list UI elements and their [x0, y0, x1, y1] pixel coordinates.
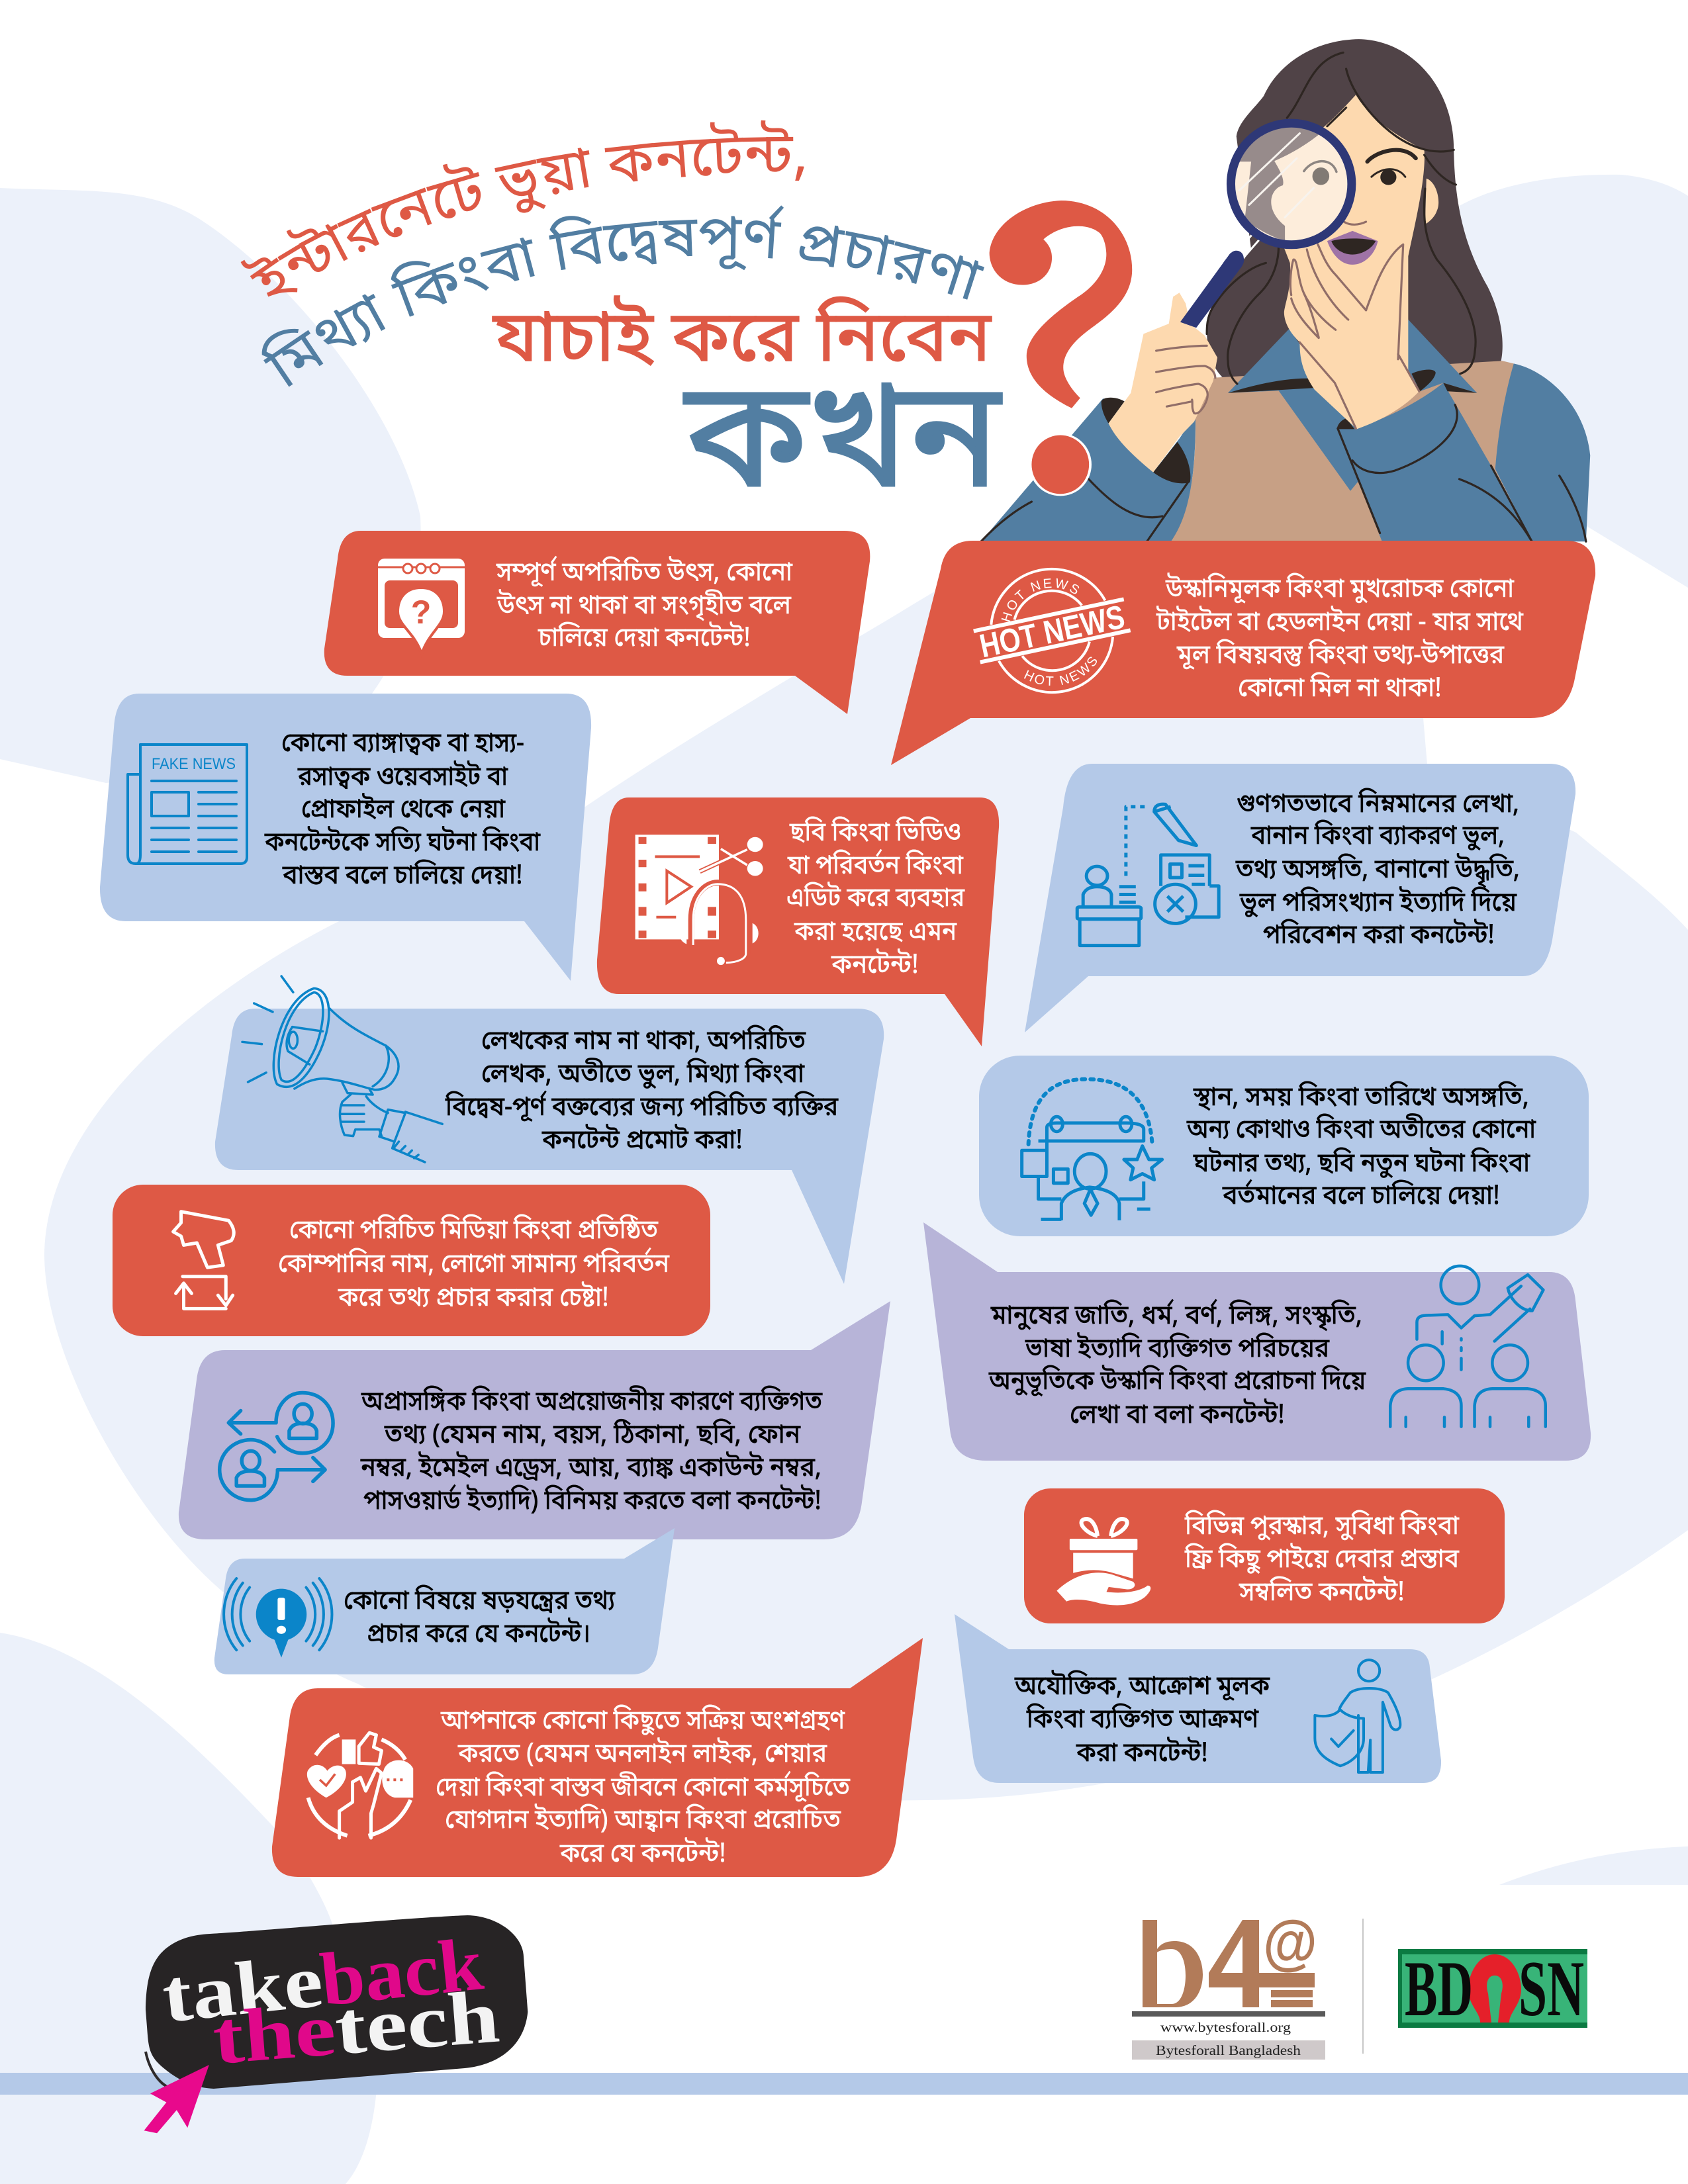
- text: edited image or video: যা পরিবর্তন কিংবা: [787, 849, 964, 885]
- text: identity provocation: অনুভূতিকে উস্কানি কিংবা প্ররোচনা দিয়ে: [988, 1365, 1366, 1400]
- text: low quality writing: পরিবেশন করা কনটেন্ট!: [1263, 919, 1495, 954]
- icon: hot news stamp: HOT NEWS: [1001, 578, 1079, 622]
- logo: take back the tech: back: [316, 1921, 487, 2022]
- text: unknown source: চালিয়ে দেয়া কনটেন্ট!: [538, 621, 751, 657]
- text: sensational headline: কোনো মিল না থাকা!: [1238, 672, 1442, 707]
- text: call to action: দেয়া কিংবা বাস্তব জীবনে কোনো কর্মসূচিতে: [436, 1771, 851, 1807]
- text: imitated brand: কোনো পরিচিত মিডিয়া কিংবা প্রতিষ্ঠিত: [289, 1214, 659, 1250]
- panel: inconsistent place and time: [979, 1056, 1589, 1236]
- text: sensational headline: [1156, 572, 1524, 707]
- text: unknown author: লেখক, অতীতে ভুল, মিথ্যা কিংবা: [481, 1058, 805, 1093]
- illustration: woman with magnifying glass: [981, 39, 1590, 541]
- text: unknown author: লেখকের নাম না থাকা, অপরিচিত: [481, 1025, 806, 1060]
- icon: hot news stamp: HOT NEWS: [976, 598, 1128, 664]
- text: imitated brand: করে তথ্য প্রচার করার চেষ্টা!: [338, 1281, 609, 1317]
- logo: b4@ Bytesforall Bangladesh: @: [1263, 1909, 1317, 1976]
- icon: film strip, scissors and headset: [635, 835, 763, 965]
- text: illogical or abusive content: করা কনটেন্ট!: [1076, 1737, 1208, 1772]
- text: personal information request: পাসওয়ার্ড ইত্যাদি) বিনিময় করতে বলা কনটেন্ট!: [363, 1484, 821, 1520]
- icon: hot news stamp: HOT NEWS: [1023, 657, 1097, 686]
- text: identity provocation: [988, 1299, 1366, 1434]
- logo: b4@ Bytesforall Bangladesh: Bytesforall Bangladesh: [1156, 2042, 1301, 2058]
- icon: like, heart and chat ring: [307, 1733, 413, 1838]
- panel: unknown author: [215, 976, 884, 1284]
- icon: calendar with presenter and star: [1022, 1079, 1162, 1220]
- title: curved and stacked heading: [241, 120, 1003, 547]
- icon: writer at desk with pencil and rejected document: [1077, 804, 1219, 946]
- text: satire or parody: কনটেন্টকে সত্যি ঘটনা কিংবা: [264, 826, 541, 862]
- text: personal information request: তথ্য (যেমন নাম, বয়স, ঠিকানা, ছবি, ফোন: [384, 1419, 801, 1454]
- icon: broadcast alert pin: [224, 1578, 332, 1658]
- text: low quality writing: ভুল পরিসংখ্যান ইত্যাদি দিয়ে: [1239, 886, 1517, 922]
- panel: edited image or video: [597, 797, 999, 1046]
- icon: megaphone and swap arrows: [173, 1212, 234, 1308]
- panel: imitated brand: [113, 1185, 710, 1336]
- text: illogical or abusive content: কিংবা ব্যক্তিগত আক্রমণ: [1026, 1703, 1259, 1739]
- text: inconsistent place and time: ঘটনার তথ্য, ছবি নতুন ঘটনা কিংবা: [1193, 1147, 1530, 1183]
- text: edited image or video: কনটেন্ট!: [831, 948, 919, 984]
- title line 1: ইন্টারনেটে ভুয়া কনটেন্ট,: [241, 120, 804, 296]
- text: unknown author: [445, 1025, 839, 1160]
- text: low quality writing: বানান কিংবা ব্যাকরণ ভুল,: [1250, 820, 1505, 855]
- text: inconsistent place and time: স্থান, সময় কিংবা তারিখে অসঙ্গতি,: [1193, 1081, 1529, 1116]
- text: low quality writing: [1235, 788, 1520, 954]
- text: inconsistent place and time: [1186, 1081, 1536, 1215]
- text: unknown author: বিদ্বেষ-পূর্ণ বক্তব্যের জন্য পরিচিত ব্যক্তির: [445, 1091, 839, 1126]
- text: identity provocation: ভাষা ইত্যাদি ব্যক্তিগত পরিচয়ের: [1025, 1332, 1330, 1368]
- text: sensational headline: মূল বিষয়বস্তু কিংবা তথ্য-উপাত্তের: [1176, 639, 1505, 674]
- text: call to action: যোগদান ইত্যাদি) আহ্বান কিংবা প্ররোচিত: [445, 1803, 841, 1839]
- text: call to action: করতে (যেমন অনলাইন লাইক, শেয়ার: [457, 1737, 827, 1773]
- text: call to action: [436, 1704, 851, 1873]
- text: sensational headline: টাইটেল বা হেডলাইন দেয়া - যার সাথে: [1156, 606, 1524, 641]
- text: unknown author: কনটেন্ট প্রমোট করা!: [541, 1124, 743, 1160]
- text: conspiracy: কোনো বিষয়ে ষড়যন্ত্রের তথ্য: [344, 1585, 616, 1620]
- icon: hot news stamp: [973, 568, 1131, 694]
- text: low quality writing: তথ্য অসঙ্গতি, বানানো উদ্ধৃতি,: [1235, 853, 1520, 889]
- panel: identity provocation: [923, 1222, 1591, 1461]
- icon: large question mark: [990, 201, 1132, 495]
- text: conspiracy: প্রচার করে যে কনটেন্ট।: [367, 1617, 590, 1653]
- text: unknown source: উৎস না থাকা বা সংগৃহীত বলে: [496, 589, 792, 625]
- panel: low quality writing: [1025, 764, 1575, 1032]
- text: free gift offer: বিভিন্ন পুরস্কার, সুবিধা কিংবা: [1184, 1510, 1460, 1545]
- icon: browser with question pin: [378, 559, 465, 654]
- text: edited image or video: করা হয়েছে এমন: [794, 916, 957, 951]
- logo: take back the tech: tech: [332, 1974, 502, 2071]
- logo: take back the tech: [144, 1915, 528, 2133]
- text: imitated brand: কোম্পানির নাম, লোগো সামান্য পরিবর্তন: [278, 1248, 670, 1283]
- text: inconsistent place and time: অন্য কোথাও কিংবা অতীতের কোনো: [1186, 1113, 1536, 1149]
- text: unknown source: সম্পূর্ণ অপরিচিত উৎস, কোনো: [496, 556, 793, 592]
- text: satire or parody: কোনো ব্যাঙ্গাত্বক বা হাস্য-: [281, 727, 524, 762]
- logo: BDOSN: [1398, 1944, 1587, 2032]
- text: satire or parody: বাস্তব বলে চালিয়ে দেয়া!: [282, 859, 523, 895]
- text: imitated brand: [278, 1214, 670, 1317]
- panel: satire or parody: [100, 694, 591, 981]
- text: satire or parody: [264, 727, 541, 895]
- text: free gift offer: সম্বলিত কনটেন্ট!: [1239, 1576, 1405, 1612]
- panel: conspiracy: [214, 1528, 675, 1674]
- text: call to action: আপনাকে কোনো কিছুতে সক্রিয় অংশগ্রহণ: [440, 1704, 845, 1740]
- logo: BDOSN: SN: [1519, 1944, 1584, 2032]
- text: free gift offer: ফ্রি কিছু পাইয়ে দেবার প্রস্তাব: [1184, 1543, 1460, 1578]
- text: illogical or abusive content: [1014, 1670, 1270, 1772]
- title line 4: কখন: [683, 349, 1002, 547]
- text: personal information request: অপ্রাসঙ্গিক কিংবা অপ্রয়োজনীয় কারণে ব্যক্তিগত: [361, 1385, 823, 1421]
- text: edited image or video: [786, 816, 965, 984]
- text: inconsistent place and time: বর্তমানের বলে চালিয়ে দেয়া!: [1222, 1179, 1500, 1215]
- text: conspiracy: [344, 1585, 616, 1653]
- text: personal information request: নম্বর, ইমেইল এড্রেস, আয়, ব্যাঙ্ক একাউন্ট নম্বর,: [360, 1451, 821, 1487]
- icon: browser with question pin: ?: [411, 594, 431, 631]
- title line 2: মিথ্যা কিংবা বিদ্বেষপূর্ণ প্রচারণা: [262, 205, 984, 387]
- text: edited image or video: ছবি কিংবা ভিডিও: [789, 816, 961, 852]
- logo: b4@ Bytesforall Bangladesh: [1132, 1909, 1325, 2060]
- text: edited image or video: এডিট করে ব্যবহার: [786, 882, 965, 917]
- panel: illogical or abusive content: [955, 1614, 1441, 1783]
- panel: unknown source: [324, 531, 870, 714]
- text: unknown source: [496, 556, 793, 657]
- text: call to action: করে যে কনটেন্ট!: [559, 1837, 726, 1873]
- text: low quality writing: গুণগতভাবে নিম্নমানের লেখা,: [1237, 788, 1519, 823]
- logo: b4@ Bytesforall Bangladesh: www.bytesforall.org: [1160, 2021, 1291, 2035]
- panel: personal information request: [179, 1301, 890, 1539]
- text: identity provocation: লেখা বা বলা কনটেন্ট!: [1070, 1398, 1285, 1434]
- icon: fake news newspaper: FAKE NEWS: [152, 755, 236, 773]
- text: satire or parody: রসাত্বক ওয়েবসাইট বা: [297, 760, 508, 796]
- panel: call to action: [272, 1638, 923, 1877]
- icon: people exchanging data: [220, 1392, 333, 1500]
- logo: take back the tech: take: [158, 1938, 326, 2038]
- text: satire or parody: প্রোফাইল থেকে নেয়া: [301, 793, 506, 829]
- title line 3: যাচাই করে নিবেন: [492, 296, 992, 390]
- logo: BDOSN: BD: [1405, 1944, 1473, 2032]
- panel: sensational headline: [891, 541, 1595, 765]
- text: illogical or abusive content: অযৌক্তিক, আক্রোশ মূলক: [1014, 1670, 1270, 1706]
- text: personal information request: [360, 1385, 823, 1520]
- panel: free gift offer: [1024, 1488, 1505, 1623]
- icon: person with shield: [1315, 1660, 1400, 1772]
- text: identity provocation: মানুষের জাতি, ধর্ম, বর্ণ, লিঙ্গ, সংস্কৃতি,: [990, 1299, 1362, 1335]
- text: free gift offer: [1184, 1510, 1460, 1612]
- text: sensational headline: উস্কানিমূলক কিংবা মুখরোচক কোনো: [1165, 572, 1515, 608]
- icon: gift on open hand: [1056, 1519, 1150, 1605]
- logo: take back the tech: the: [210, 1987, 338, 2080]
- icon: fake news newspaper: [128, 745, 247, 864]
- icon: hand holding megaphone: [242, 976, 442, 1162]
- footer band: [0, 2073, 1688, 2095]
- icon: speaker addressing two people: [1390, 1266, 1546, 1427]
